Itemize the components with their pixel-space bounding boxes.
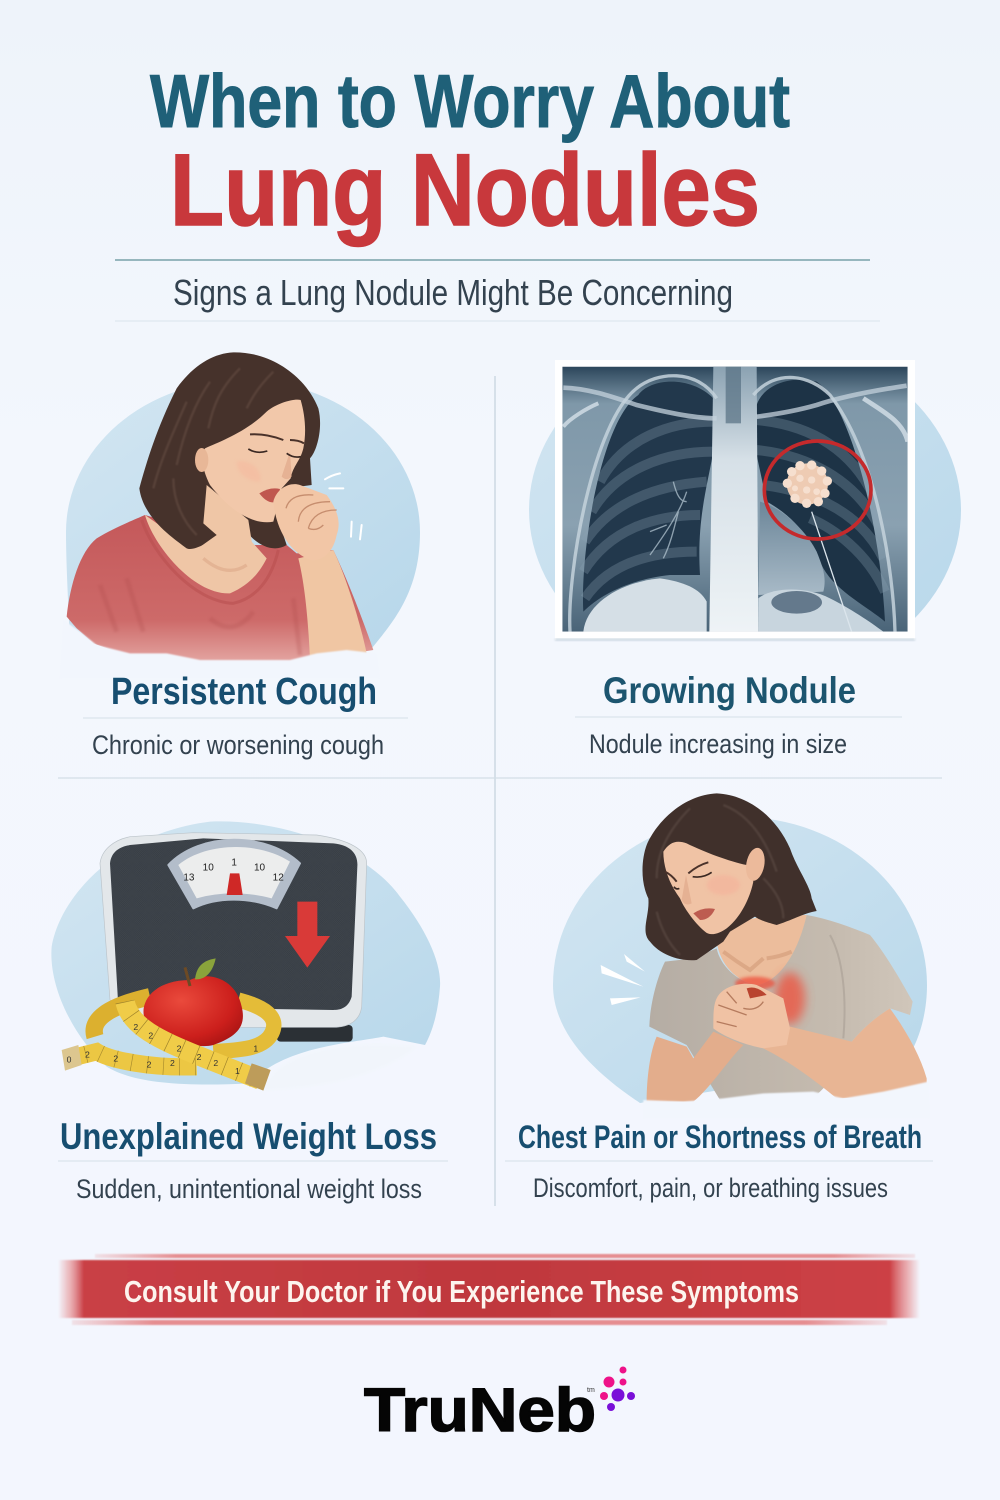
card heading: persistent cough: Persistent Cough xyxy=(111,671,377,713)
tape measure front: 2 xyxy=(133,1022,138,1032)
tape measure front: 1 xyxy=(253,1044,258,1054)
tape measure front xyxy=(62,1002,271,1091)
card heading: growing nodule: Growing Nodule xyxy=(603,670,856,711)
tape measure front: 2 xyxy=(113,1054,118,1064)
tape measure front: 2 xyxy=(148,1030,153,1040)
scale dial: 12 xyxy=(273,873,284,884)
call to action banner xyxy=(58,1254,920,1325)
icon: blue circle backdrop xyxy=(529,402,961,618)
icon: blue circle backdrop xyxy=(66,380,420,648)
tape measure front: 2 xyxy=(85,1049,90,1059)
title xyxy=(150,59,790,247)
tape measure front: 2 xyxy=(213,1058,218,1068)
logo: TruNeb: tm xyxy=(587,1387,595,1394)
logo: TruNeb: TruNeb xyxy=(364,1376,596,1444)
tape measure front: 1 xyxy=(235,1066,240,1076)
icon: apple xyxy=(143,958,243,1046)
scale dial xyxy=(168,840,300,908)
card heading: weight loss: Unexplained Weight Loss xyxy=(60,1116,437,1157)
scale dial: 10 xyxy=(254,863,266,874)
title divider xyxy=(115,259,870,261)
panel: growing nodule xyxy=(529,360,961,642)
card text: weight loss: Sudden, unintentional weight loss xyxy=(76,1174,422,1204)
call to action banner: Consult Your Doctor if You Experience These Symptoms xyxy=(124,1274,799,1309)
scale dial: 1 xyxy=(231,857,237,868)
panel: weight loss xyxy=(51,821,440,1091)
nodule xyxy=(783,460,832,508)
icon: blue circle backdrop xyxy=(51,821,440,1084)
chest x-ray xyxy=(555,360,915,641)
logo: TruNeb xyxy=(364,1366,635,1444)
panel: persistent cough xyxy=(60,352,420,678)
icon: down arrow xyxy=(285,902,330,968)
tape measure front: 2 xyxy=(177,1044,182,1054)
illustration: woman holding chest xyxy=(601,793,930,1118)
tape measure front: 2 xyxy=(170,1058,175,1068)
panel: chest pain xyxy=(553,793,930,1118)
scale dial: 13 xyxy=(183,873,195,884)
subtitle: Signs a Lung Nodule Might Be Concerning xyxy=(173,272,733,313)
illustration: coughing woman xyxy=(60,352,380,678)
card text: growing nodule: Nodule increasing in size xyxy=(589,729,847,759)
card text: chest pain: Discomfort, pain, or breathing issues xyxy=(533,1173,888,1203)
tape measure back xyxy=(70,997,274,1067)
title: When to Worry About xyxy=(150,59,790,143)
tape measure front: 0 xyxy=(67,1054,72,1064)
tape measure front: 2 xyxy=(147,1059,152,1069)
tape measure front: 2 xyxy=(197,1052,202,1062)
title: Lung Nodules xyxy=(170,133,760,247)
card text: persistent cough: Chronic or worsening cough xyxy=(92,730,384,760)
bathroom scale xyxy=(100,833,367,1042)
scale dial: 10 xyxy=(203,863,214,874)
icon: blue circle backdrop xyxy=(553,817,927,1103)
scale and apple illustration xyxy=(51,821,440,1091)
